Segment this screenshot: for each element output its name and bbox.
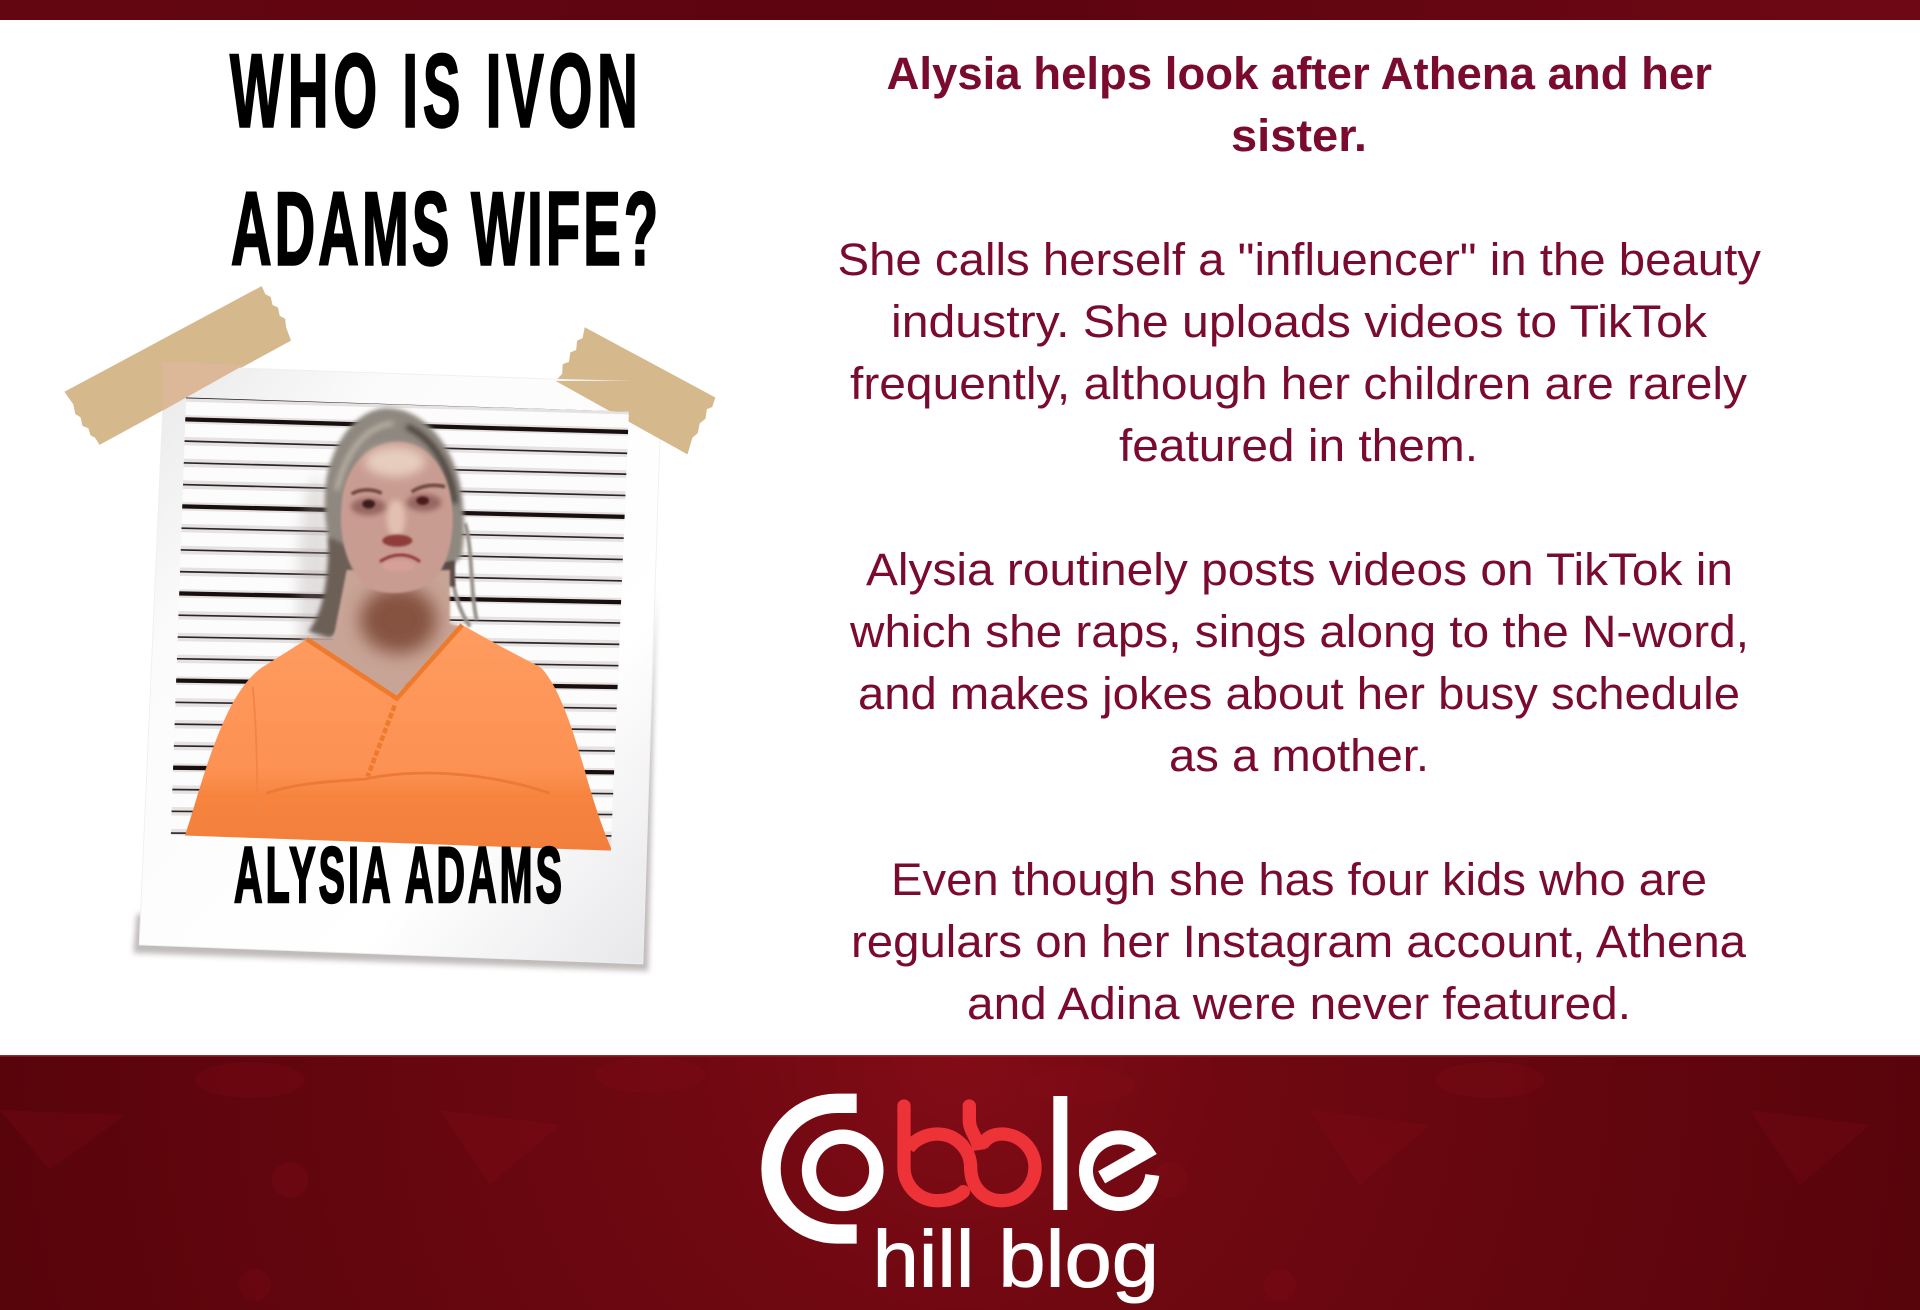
footer band bbox=[0, 1055, 1920, 1310]
collar and seams bbox=[252, 623, 550, 794]
text block: TikTok paragraph bbox=[849, 544, 1749, 781]
top band bbox=[0, 0, 1920, 20]
logo tagline bbox=[873, 1215, 1159, 1304]
forehead highlight bbox=[365, 447, 425, 477]
polaroid photo panel bbox=[64, 286, 715, 971]
logo tagline: blog bbox=[998, 1215, 1159, 1304]
logo: cobble hill blog bbox=[771, 1096, 1159, 1304]
logo letters bb bbox=[904, 1099, 1035, 1201]
text block: TikTok paragraph: which she raps, sings along to the N-word, bbox=[849, 606, 1749, 657]
text block: intro heading: Alysia helps look after Athena and her bbox=[886, 48, 1712, 99]
name caption: ALYSIA ADAMS bbox=[234, 831, 562, 920]
title: ADAMS WIFE? bbox=[231, 170, 658, 287]
hair strands right bbox=[450, 523, 477, 627]
text block: Instagram paragraph: Even though she has four kids who are bbox=[891, 854, 1707, 905]
nose highlight bbox=[387, 500, 405, 537]
text block: influencer paragraph bbox=[838, 234, 1762, 471]
neck and chest bbox=[300, 570, 463, 700]
icon: left tape bbox=[64, 286, 291, 445]
hair bbox=[325, 408, 464, 570]
mugshot head bbox=[300, 408, 477, 700]
polaroid frame and wall bbox=[64, 286, 715, 971]
logo letter o bbox=[809, 1137, 876, 1204]
title bbox=[230, 32, 658, 287]
text block: Instagram paragraph: regulars on her Instagram account, Athena bbox=[851, 916, 1747, 967]
nose bbox=[382, 535, 412, 547]
text block: intro heading: sister. bbox=[1231, 110, 1367, 161]
orange shirt bbox=[184, 625, 613, 853]
tape overlap right bbox=[555, 381, 663, 440]
text block: Instagram paragraph bbox=[851, 854, 1747, 1029]
text block: TikTok paragraph: Alysia routinely posts videos on TikTok in bbox=[866, 544, 1733, 595]
hair highlights bbox=[337, 423, 393, 490]
text block: TikTok paragraph: and makes jokes about her busy schedule bbox=[858, 668, 1740, 719]
logo letter C bbox=[771, 1103, 857, 1234]
text block: TikTok paragraph: as a mother. bbox=[1169, 730, 1429, 781]
tape overlap left bbox=[163, 362, 244, 411]
text block: Instagram paragraph: and Adina were never featured. bbox=[967, 978, 1631, 1029]
eyes and brows bbox=[351, 485, 445, 515]
title: WHO IS IVON bbox=[230, 32, 638, 149]
height chart wall bbox=[167, 397, 631, 852]
icon: right tape bbox=[555, 327, 715, 454]
logo letter e bbox=[1086, 1137, 1152, 1204]
polaroid shadow bbox=[133, 592, 656, 971]
mouth bbox=[380, 555, 420, 562]
text block: influencer paragraph: frequently, although her children are rarely bbox=[850, 358, 1748, 409]
text block: influencer paragraph: featured in them. bbox=[1119, 420, 1478, 471]
polaroid paper bbox=[139, 367, 662, 964]
text block: influencer paragraph: She calls herself a "influencer" in the beauty bbox=[838, 234, 1762, 285]
logo letter l bbox=[1053, 1096, 1067, 1210]
face bbox=[341, 442, 453, 593]
logo tagline: hill bbox=[873, 1215, 974, 1304]
text block: influencer paragraph: industry. She uploads videos to TikTok bbox=[891, 296, 1708, 347]
hair lower left bbox=[308, 537, 377, 638]
text block: intro heading bbox=[886, 48, 1712, 161]
